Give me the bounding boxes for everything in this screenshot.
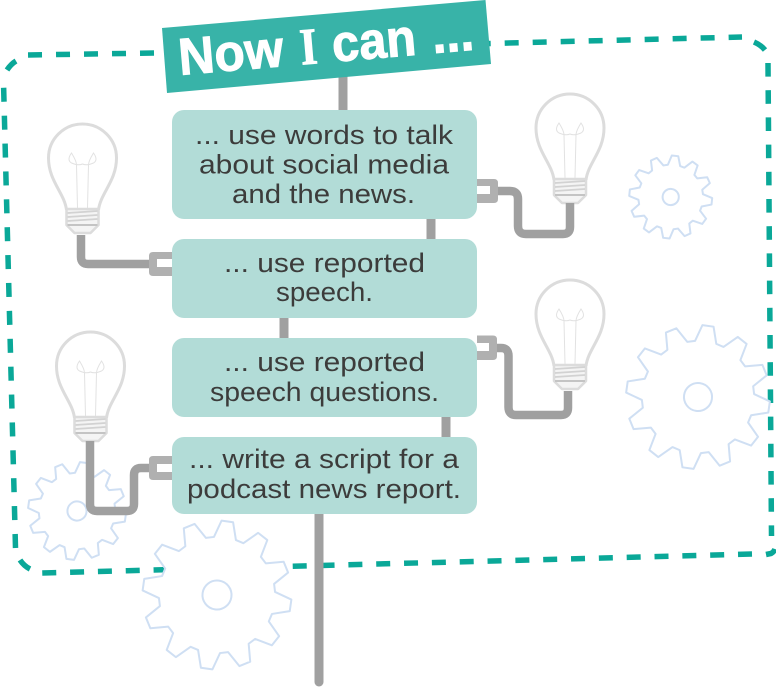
gear: upper right small xyxy=(625,152,716,242)
box 4: podcast news report xyxy=(172,437,477,514)
box 1: social media and the news: and the news. xyxy=(232,179,415,209)
box 1: social media and the news xyxy=(172,110,477,219)
box 1: social media and the news: about social media xyxy=(199,150,450,180)
box 3: reported speech questions: ... use reported xyxy=(224,347,425,377)
dashed border xyxy=(4,37,775,573)
box 2: reported speech: speech. xyxy=(276,277,373,307)
gear: bottom large xyxy=(133,511,301,679)
box 4: podcast news report: podcast news report. xyxy=(187,474,461,504)
gear: right large xyxy=(617,316,776,478)
banner: Now I can ...: I xyxy=(298,18,320,77)
bulb 4 with wire xyxy=(56,332,172,511)
box 3: reported speech questions: speech questions. xyxy=(210,377,439,407)
box 1: social media and the news: ... use words to talk xyxy=(195,120,454,150)
bulb 1 with wire xyxy=(48,124,172,276)
box 3: reported speech questions xyxy=(172,338,477,417)
bulb 2 with wire xyxy=(477,94,604,234)
box 2: reported speech xyxy=(172,239,477,318)
banner: Now I can ...: can xyxy=(330,9,418,74)
banner: Now I can ...: ... xyxy=(429,4,476,65)
main connecting line xyxy=(284,70,446,682)
gear: lower left small xyxy=(22,456,132,566)
box 2: reported speech: ... use reported xyxy=(224,248,425,278)
bulb 3 with wire xyxy=(477,280,604,415)
banner: Now I can ...: Now xyxy=(176,20,286,87)
box 4: podcast news report: ... write a script for a xyxy=(189,444,460,474)
banner: Now I can ... xyxy=(162,0,491,93)
